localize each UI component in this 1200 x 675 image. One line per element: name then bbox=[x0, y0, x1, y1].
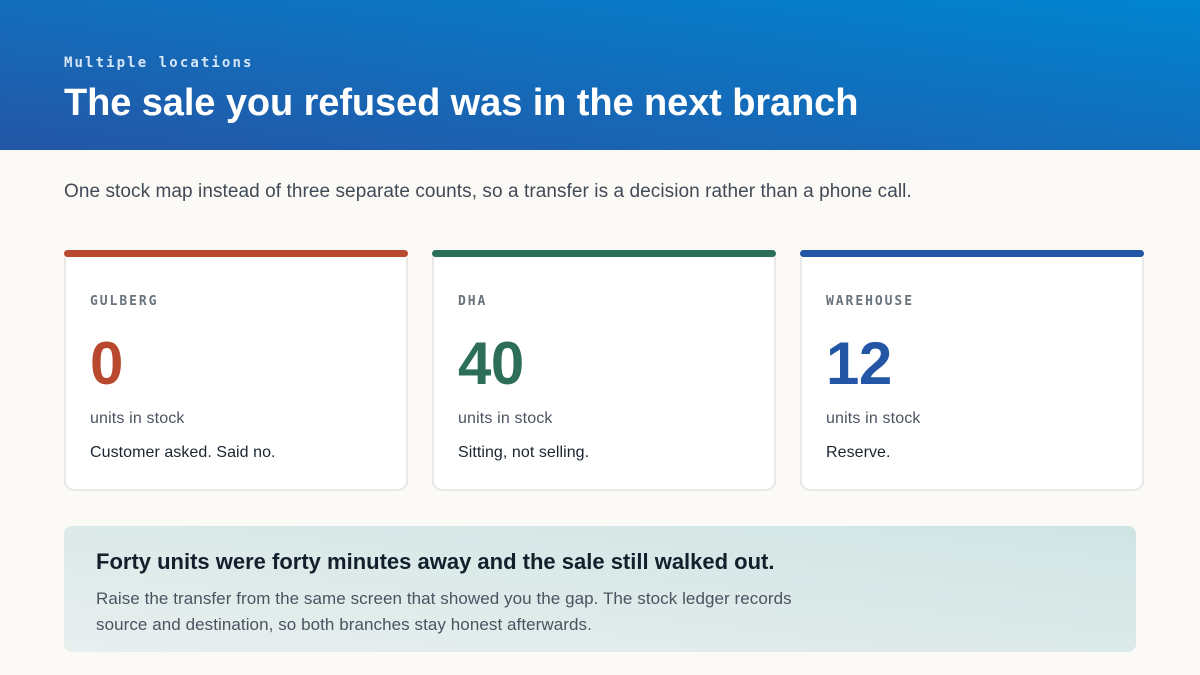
panel: Gulberg stock card bbox=[64, 250, 408, 491]
eyebrow label: Multiple locations bbox=[64, 55, 254, 71]
panel: DHA stock card bbox=[432, 250, 776, 491]
header banner bbox=[0, 0, 1200, 150]
stock number: DHA: 40 bbox=[458, 330, 524, 397]
callout bbox=[64, 526, 1136, 652]
unit caption: Warehouse: units in stock bbox=[826, 410, 921, 427]
panel: Warehouse stock card bbox=[800, 250, 1144, 491]
stock number: Gulberg: 0 bbox=[90, 330, 123, 397]
card label: Warehouse: WAREHOUSE bbox=[826, 294, 914, 309]
title: The sale you refused was in the next branch bbox=[64, 82, 858, 124]
card note: DHA: Sitting, not selling. bbox=[458, 444, 589, 461]
card note: Gulberg: Customer asked. Said no. bbox=[90, 444, 276, 461]
intro text: One stock map instead of three separate counts, so a transfer is a decision rather than a phone call. bbox=[64, 181, 912, 202]
callout body text: Raise the transfer from the same screen that showed you the gap. The stock ledger records bbox=[96, 589, 792, 608]
unit caption: DHA: units in stock bbox=[458, 410, 553, 427]
stock number: Warehouse: 12 bbox=[826, 330, 892, 397]
card note: Warehouse: Reserve. bbox=[826, 444, 891, 461]
callout heading: Forty units were forty minutes away and the sale still walked out. bbox=[96, 549, 774, 574]
callout body text: source and destination, so both branches stay honest afterwards. bbox=[96, 615, 592, 634]
unit caption: Gulberg: units in stock bbox=[90, 410, 185, 427]
card label: Gulberg: GULBERG bbox=[90, 294, 158, 309]
callout body text bbox=[96, 589, 792, 634]
card label: DHA: DHA bbox=[458, 294, 487, 309]
